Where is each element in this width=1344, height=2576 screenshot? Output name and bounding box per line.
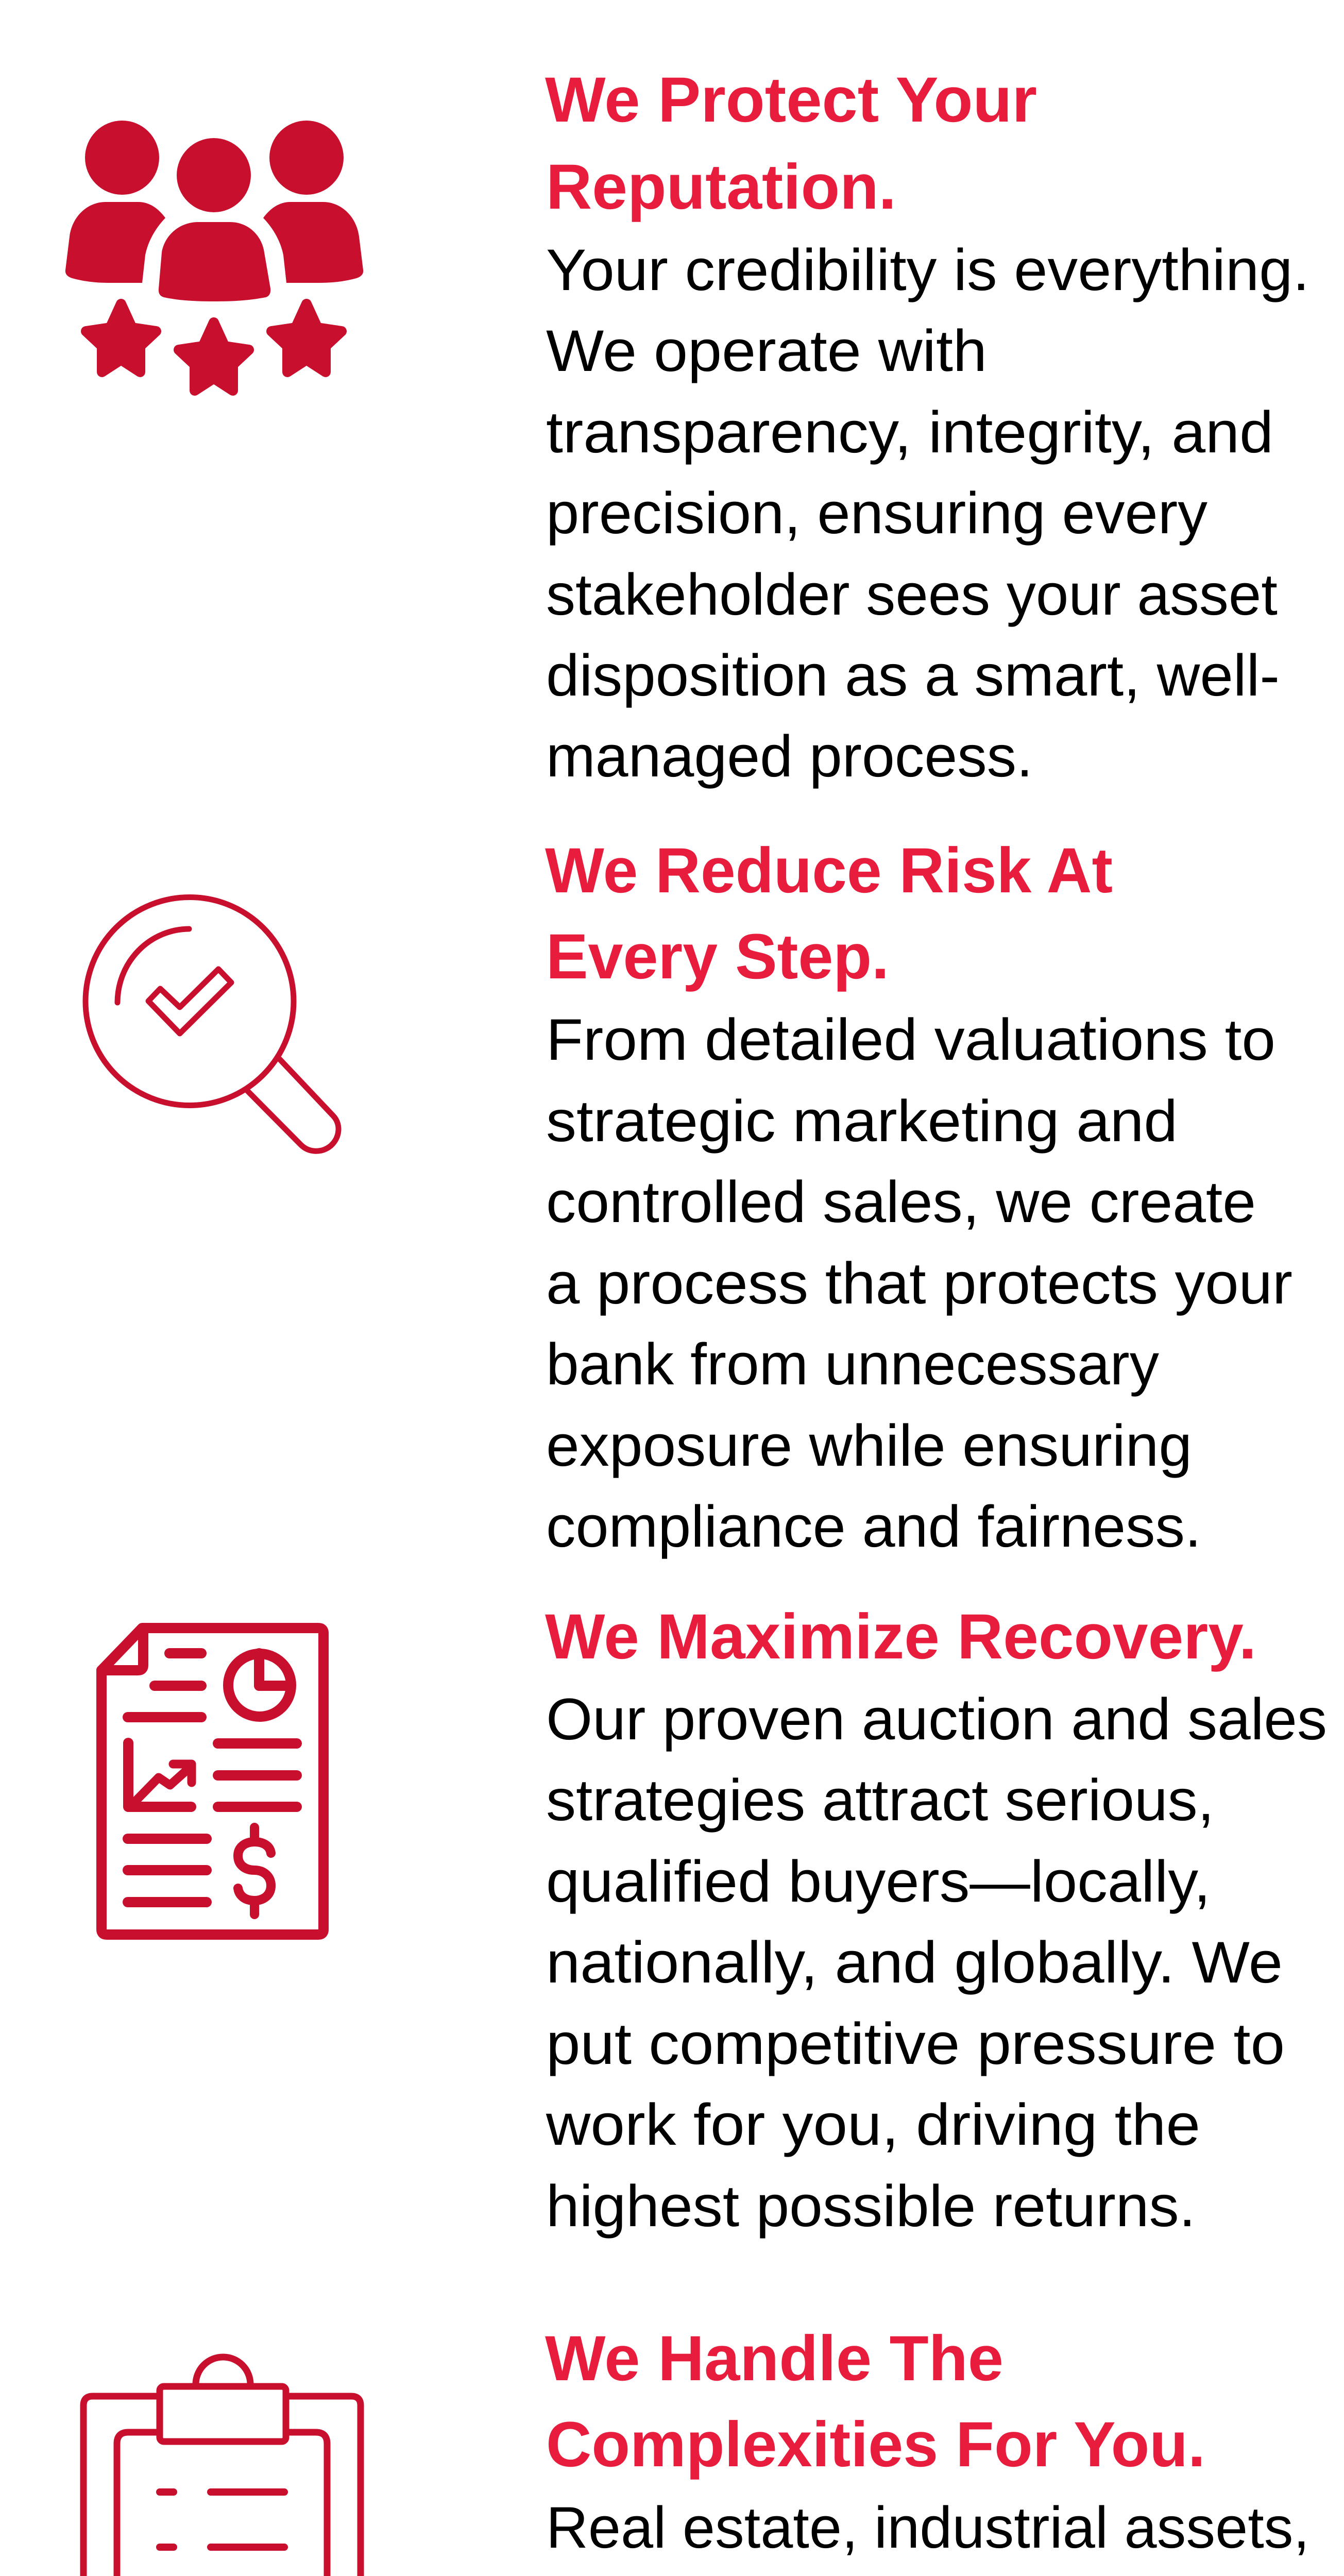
text block: recovery body: strategies attract serious, <box>546 1768 1214 1833</box>
text block: reputation body: managed process. <box>546 724 1033 789</box>
text block: reputation body: We operate with <box>546 318 987 384</box>
text block: recovery body: highest possible returns. <box>546 2174 1196 2239</box>
text block: reputation body: precision, ensuring every <box>546 481 1207 546</box>
icon: financial report document <box>101 1628 324 1935</box>
text block: recovery body: put competitive pressure to <box>546 2011 1285 2077</box>
heading: we maximize recovery: We Maximize Recovery. <box>545 1601 1256 1672</box>
text block: reputation body: disposition as a smart, well- <box>546 643 1280 708</box>
heading: we reduce risk at every step <box>545 835 1113 992</box>
heading: we protect your reputation <box>545 64 1037 223</box>
heading: we handle the complexities for you: We Handle The <box>545 2323 1003 2394</box>
icon: magnifying glass with check mark <box>86 897 338 1151</box>
panel: we handle the complexities for you <box>83 2323 1309 2576</box>
panel: we reduce risk at every step <box>86 835 1292 1560</box>
heading: we handle the complexities for you <box>545 2323 1205 2480</box>
text block: complexities body: Real estate, industrial assets, <box>546 2495 1309 2561</box>
text block: risk body: From detailed valuations to <box>546 1007 1275 1073</box>
text block: risk body <box>546 1007 1292 1560</box>
text block: recovery body: work for you, driving the <box>546 2092 1200 2158</box>
heading: we handle the complexities for you: Complexities For You. <box>546 2409 1205 2480</box>
text block: risk body: strategic marketing and <box>546 1089 1178 1154</box>
text block: reputation body: stakeholder sees your asset <box>546 562 1278 628</box>
text block: reputation body: Your credibility is everything. <box>546 238 1309 303</box>
heading: we protect your reputation: Reputation. <box>546 151 896 223</box>
text block: recovery body: nationally, and globally. We <box>546 1930 1283 1995</box>
text block: reputation body: transparency, integrity, and <box>546 400 1273 465</box>
heading: we protect your reputation: We Protect Your <box>545 64 1037 135</box>
heading: we reduce risk at every step: Every Step. <box>546 921 889 992</box>
text block: recovery body: Our proven auction and sales <box>546 1687 1327 1752</box>
text block: risk body: a process that protects your <box>546 1251 1292 1316</box>
panel: we maximize recovery <box>101 1601 1327 2239</box>
heading: we reduce risk at every step: We Reduce Risk At <box>545 835 1113 906</box>
text block: risk body: exposure while ensuring <box>546 1413 1192 1479</box>
text block: recovery body: qualified buyers—locally, <box>546 1849 1211 1914</box>
text block: recovery body <box>546 1687 1327 2239</box>
panel: we protect your reputation <box>65 64 1309 789</box>
text block: risk body: bank from unnecessary <box>546 1332 1159 1397</box>
icon: clipboard checklist <box>83 2357 361 2576</box>
text block: risk body: compliance and fairness. <box>546 1494 1201 1560</box>
text block: risk body: controlled sales, we create <box>546 1170 1256 1235</box>
icon: three people with stars <box>65 121 363 391</box>
text block: reputation body <box>546 238 1309 789</box>
